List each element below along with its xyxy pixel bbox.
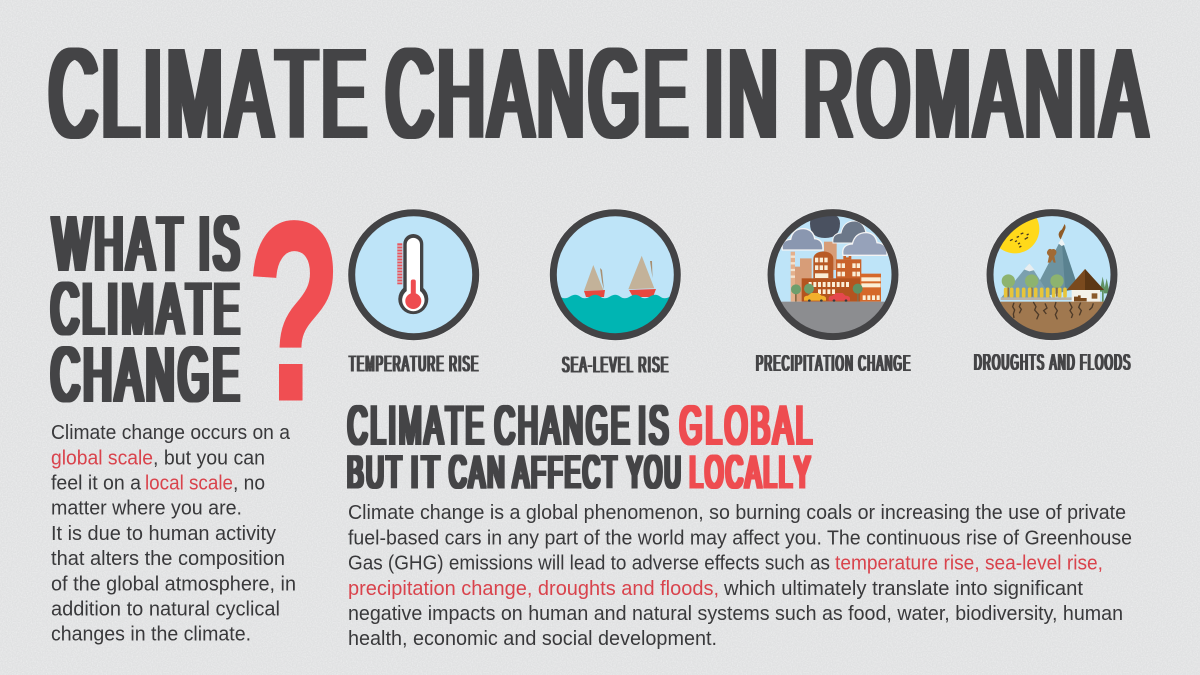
icon: temperature rise xyxy=(348,209,480,341)
heading: climate change is global but it can affect you locally: BUT xyxy=(347,446,404,497)
text block: climate change explanation: It is due to human activity xyxy=(51,523,276,545)
text block: climate change explanation: matter where you are. xyxy=(51,498,242,520)
text: IS xyxy=(199,201,243,287)
text block: global phenomenon paragraph: precipitation change, droughts and floods, xyxy=(348,578,719,600)
text block: climate change explanation: global scale xyxy=(51,447,153,469)
title: CLIMATE xyxy=(49,23,371,164)
title xyxy=(49,23,1151,164)
heading: climate change is global but it can affect you locally: GLOBAL xyxy=(680,394,815,456)
question mark: ? xyxy=(247,169,341,453)
heading: climate change is global but it can affect you locally: LOCALLY xyxy=(690,446,812,497)
text block: global phenomenon paragraph: negative impacts on human and natural systems such as food, water, biodiversity, human xyxy=(348,603,1123,625)
heading: climate change is global but it can affect you locally: IS xyxy=(638,394,672,456)
text block: global phenomenon paragraph xyxy=(348,502,1132,650)
text block: climate change explanation: feel it on a xyxy=(51,473,142,495)
text: TEMPERATURE RISE xyxy=(349,350,480,376)
icon: sea-level rise xyxy=(549,209,690,345)
text: PRECIPITATION CHANGE xyxy=(756,350,912,376)
text block: climate change explanation: addition to natural cyclical xyxy=(51,598,280,620)
heading: climate change is global but it can affect you locally xyxy=(347,394,815,497)
heading: climate change is global but it can affect you locally: IT xyxy=(410,446,442,497)
text block: climate change explanation: that alters the composition xyxy=(51,548,285,570)
heading: what is climate change: WHAT xyxy=(53,201,186,287)
heading: what is climate change xyxy=(51,201,243,418)
text: SEA-LEVEL RISE xyxy=(562,351,670,377)
text block: global phenomenon paragraph: which ultimately translate into significant xyxy=(723,578,1083,600)
text block: global phenomenon paragraph: Gas (GHG) emissions will lead to adverse effects such as xyxy=(348,553,830,575)
text block: climate change explanation: changes in the climate. xyxy=(51,624,251,646)
text block: climate change explanation: of the global atmosphere, in xyxy=(51,573,296,595)
text block: climate change explanation: Climate change occurs on a xyxy=(51,422,291,444)
text block: climate change explanation: , no xyxy=(233,473,265,495)
text block: global phenomenon paragraph: fuel-based cars in any part of the world may affect you. The continuous rise of Greenhouse xyxy=(348,527,1132,549)
text block: climate change explanation xyxy=(51,422,296,646)
heading: what is climate change: CHANGE xyxy=(51,332,243,418)
text block: climate change explanation: local scale xyxy=(145,473,233,495)
title: IN xyxy=(704,23,782,164)
heading: climate change is global but it can affect you locally: CAN xyxy=(449,446,507,497)
heading: climate change is global but it can affect you locally: CHANGE xyxy=(494,394,632,456)
icon: droughts and floods xyxy=(986,205,1118,341)
heading: climate change is global but it can affect you locally: CLIMATE xyxy=(348,394,486,456)
text block: climate change explanation: , but you can xyxy=(153,447,265,469)
text block: global phenomenon paragraph: temperature rise, sea-level rise, xyxy=(835,553,1103,575)
heading: climate change is global but it can affect you locally: AFFECT xyxy=(513,446,619,497)
icon: precipitation change xyxy=(767,209,899,341)
heading: what is climate change: CLIMATE xyxy=(51,269,243,350)
heading: climate change is global but it can affect you locally: YOU xyxy=(627,446,683,497)
title: CHANGE xyxy=(386,23,692,164)
text block: global phenomenon paragraph: Climate change is a global phenomenon, so burning coals or increasing the use of private xyxy=(348,502,1126,524)
text block: global phenomenon paragraph: health, economic and social development. xyxy=(348,628,717,650)
